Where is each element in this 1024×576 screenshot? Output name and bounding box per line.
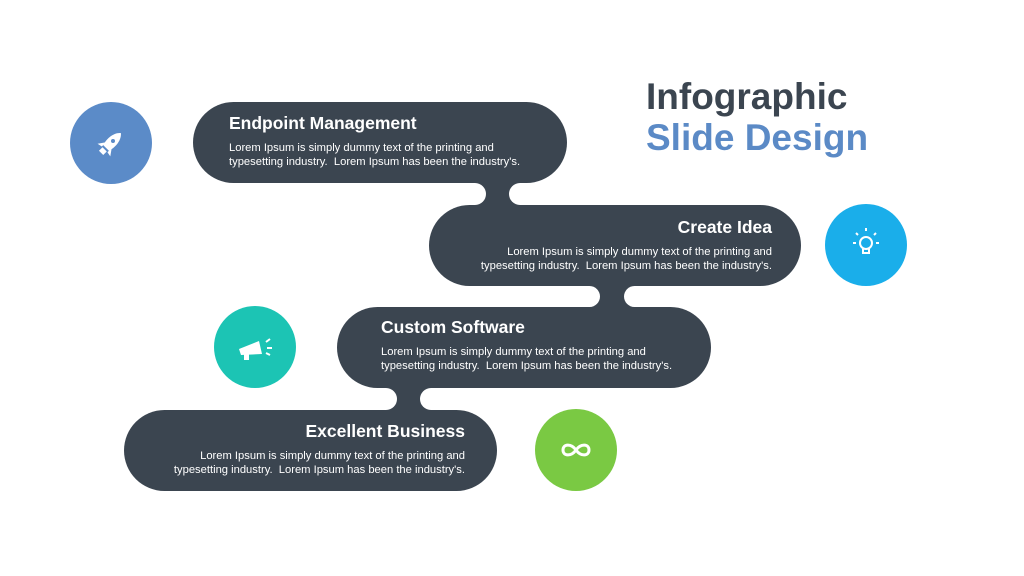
text: Excellent Business: [174, 421, 465, 476]
text: Endpoint Management: Lorem Ipsum is simply dummy text of the printing and: [229, 142, 494, 154]
text: Endpoint Management: typesetting industry. Lorem Ipsum has been the industry's.: [229, 156, 520, 168]
text: Create Idea: Lorem Ipsum is simply dummy text of the printing and: [507, 246, 772, 258]
text: Excellent Business: Lorem Ipsum is simply dummy text of the printing and: [200, 450, 465, 462]
text: Custom Software: Custom Software: [381, 317, 525, 337]
text: Custom Software: typesetting industry. Lorem Ipsum has been the industry's.: [381, 360, 672, 372]
text: Create Idea: Create Idea: [678, 217, 772, 237]
text: Endpoint Management: Endpoint Management: [229, 113, 417, 133]
title: [646, 76, 868, 158]
icon: rocket: [70, 102, 152, 184]
pill 4: [124, 410, 497, 491]
text: Custom Software: Lorem Ipsum is simply dummy text of the printing and: [381, 346, 646, 358]
title: Infographic: [646, 76, 847, 117]
pill 1: [193, 102, 567, 183]
text: Endpoint Management: [229, 113, 520, 168]
text: Create Idea: [481, 217, 772, 272]
pill 3: [337, 307, 711, 388]
text: Excellent Business: Excellent Business: [305, 421, 465, 441]
text: Custom Software: [381, 317, 672, 372]
text: Create Idea: typesetting industry. Lorem Ipsum has been the industry's.: [481, 260, 772, 272]
title: Slide Design: [646, 117, 868, 158]
connectors: [470, 175, 525, 215]
text: Excellent Business: typesetting industry. Lorem Ipsum has been the industry's.: [174, 464, 465, 476]
pill 2: [429, 205, 801, 286]
icon: infinity: [535, 409, 617, 491]
icon: megaphone: [214, 306, 296, 388]
icon: light bulb: [825, 204, 907, 286]
